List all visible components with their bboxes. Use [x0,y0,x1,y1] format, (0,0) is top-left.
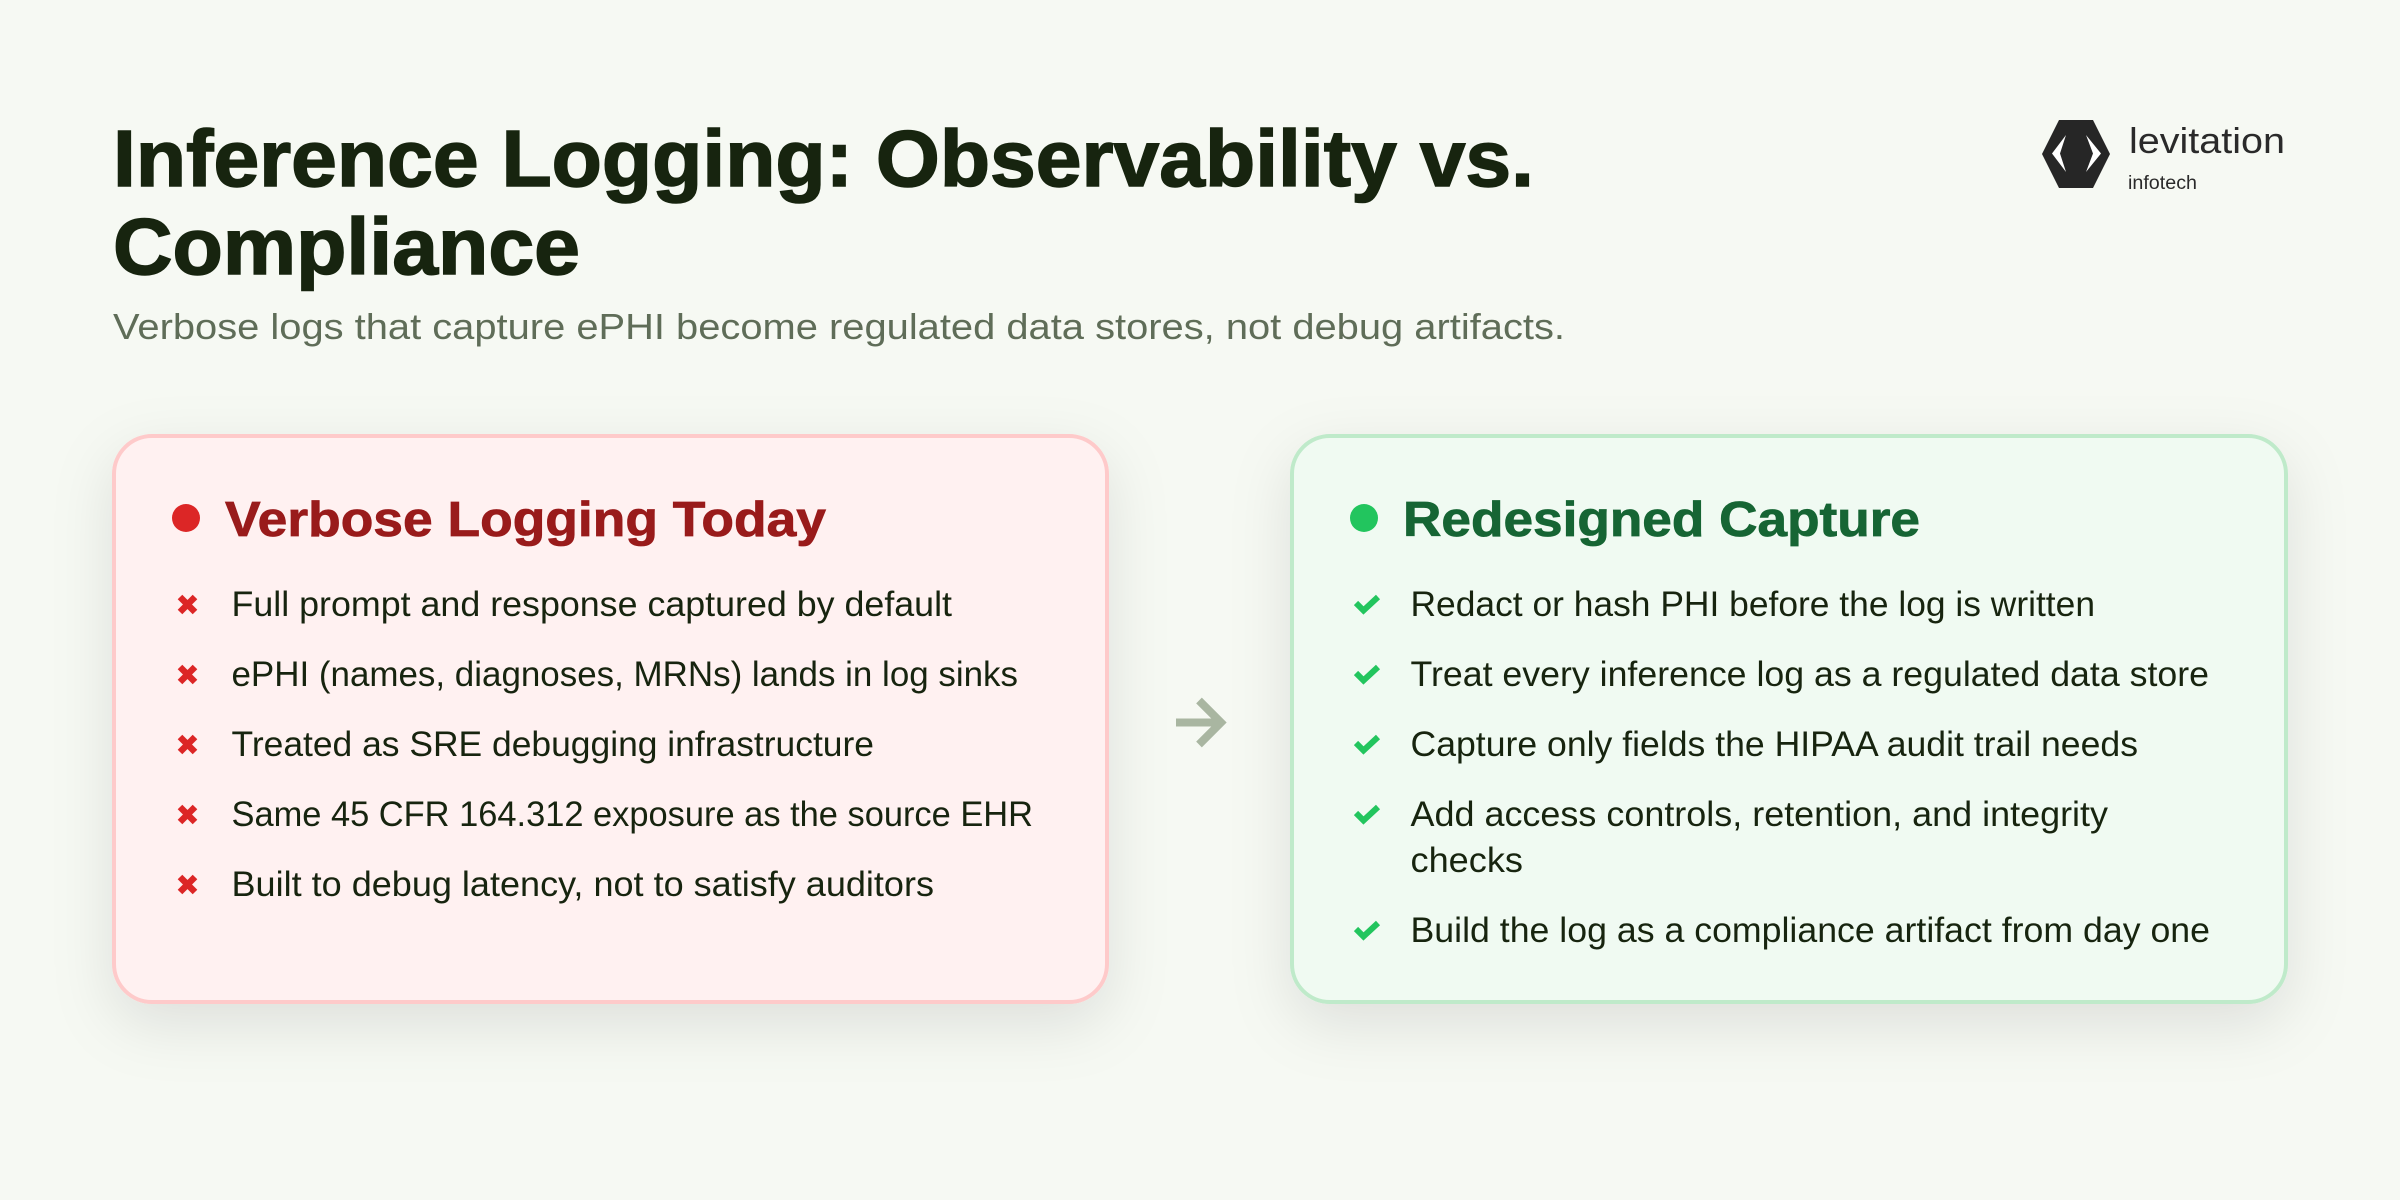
logo wordmark: levitation [2129,120,2285,161]
panel: redesigned capture [1292,436,2286,1002]
icon: cross [180,807,195,822]
list: fixes: Add access controls, retention, and integrity [1410,795,2109,834]
heading: redesigned capture: Redesigned Capture [1403,493,1920,547]
icon: check [1356,807,1378,820]
list: problems: Treated as SRE debugging infrastructure [232,725,874,764]
icon: check [1356,923,1378,936]
list: problems: Built to debug latency, not to satisfy auditors [232,865,934,904]
list: problems: ePHI (names, diagnoses, MRNs) lands in log sinks [232,655,1018,694]
title: Compliance [113,202,580,291]
status dot: red [172,504,200,532]
list: fixes: Treat every inference log as a regulated data store [1410,655,2209,694]
subtitle: Verbose logs that capture ePHI become regulated data stores, not debug artifacts. [113,306,1565,347]
icon: cross [180,877,195,892]
title: Inference Logging: Observability vs. [113,114,1534,203]
list: fixes: checks [1410,841,1523,880]
icon: check [1356,597,1378,610]
list: fixes: Build the log as a compliance artifact from day one [1410,911,2210,950]
logo wordmark [2128,120,2285,194]
list: fixes [1356,585,2210,950]
icon: check [1356,737,1378,750]
panel: verbose logging today [114,436,1107,1002]
logo [2042,120,2285,194]
list: fixes: Redact or hash PHI before the log is written [1410,585,2095,624]
list: problems: Same 45 CFR 164.312 exposure as the source EHR [232,795,1033,834]
list: problems [180,585,1033,904]
logo wordmark: infotech [2128,173,2197,194]
title [113,114,1534,291]
list: problems: Full prompt and response captured by default [232,585,952,624]
heading: verbose logging today: Verbose Logging Today [225,493,826,547]
status dot: green [1350,504,1378,532]
icon: hexagon logo mark [2042,120,2110,188]
icon: cross [180,667,195,682]
icon: cross [180,737,195,752]
list: fixes: Capture only fields the HIPAA audit trail needs [1410,725,2138,764]
arrow [1176,700,1221,744]
icon: check [1356,667,1378,680]
icon: cross [180,597,195,612]
